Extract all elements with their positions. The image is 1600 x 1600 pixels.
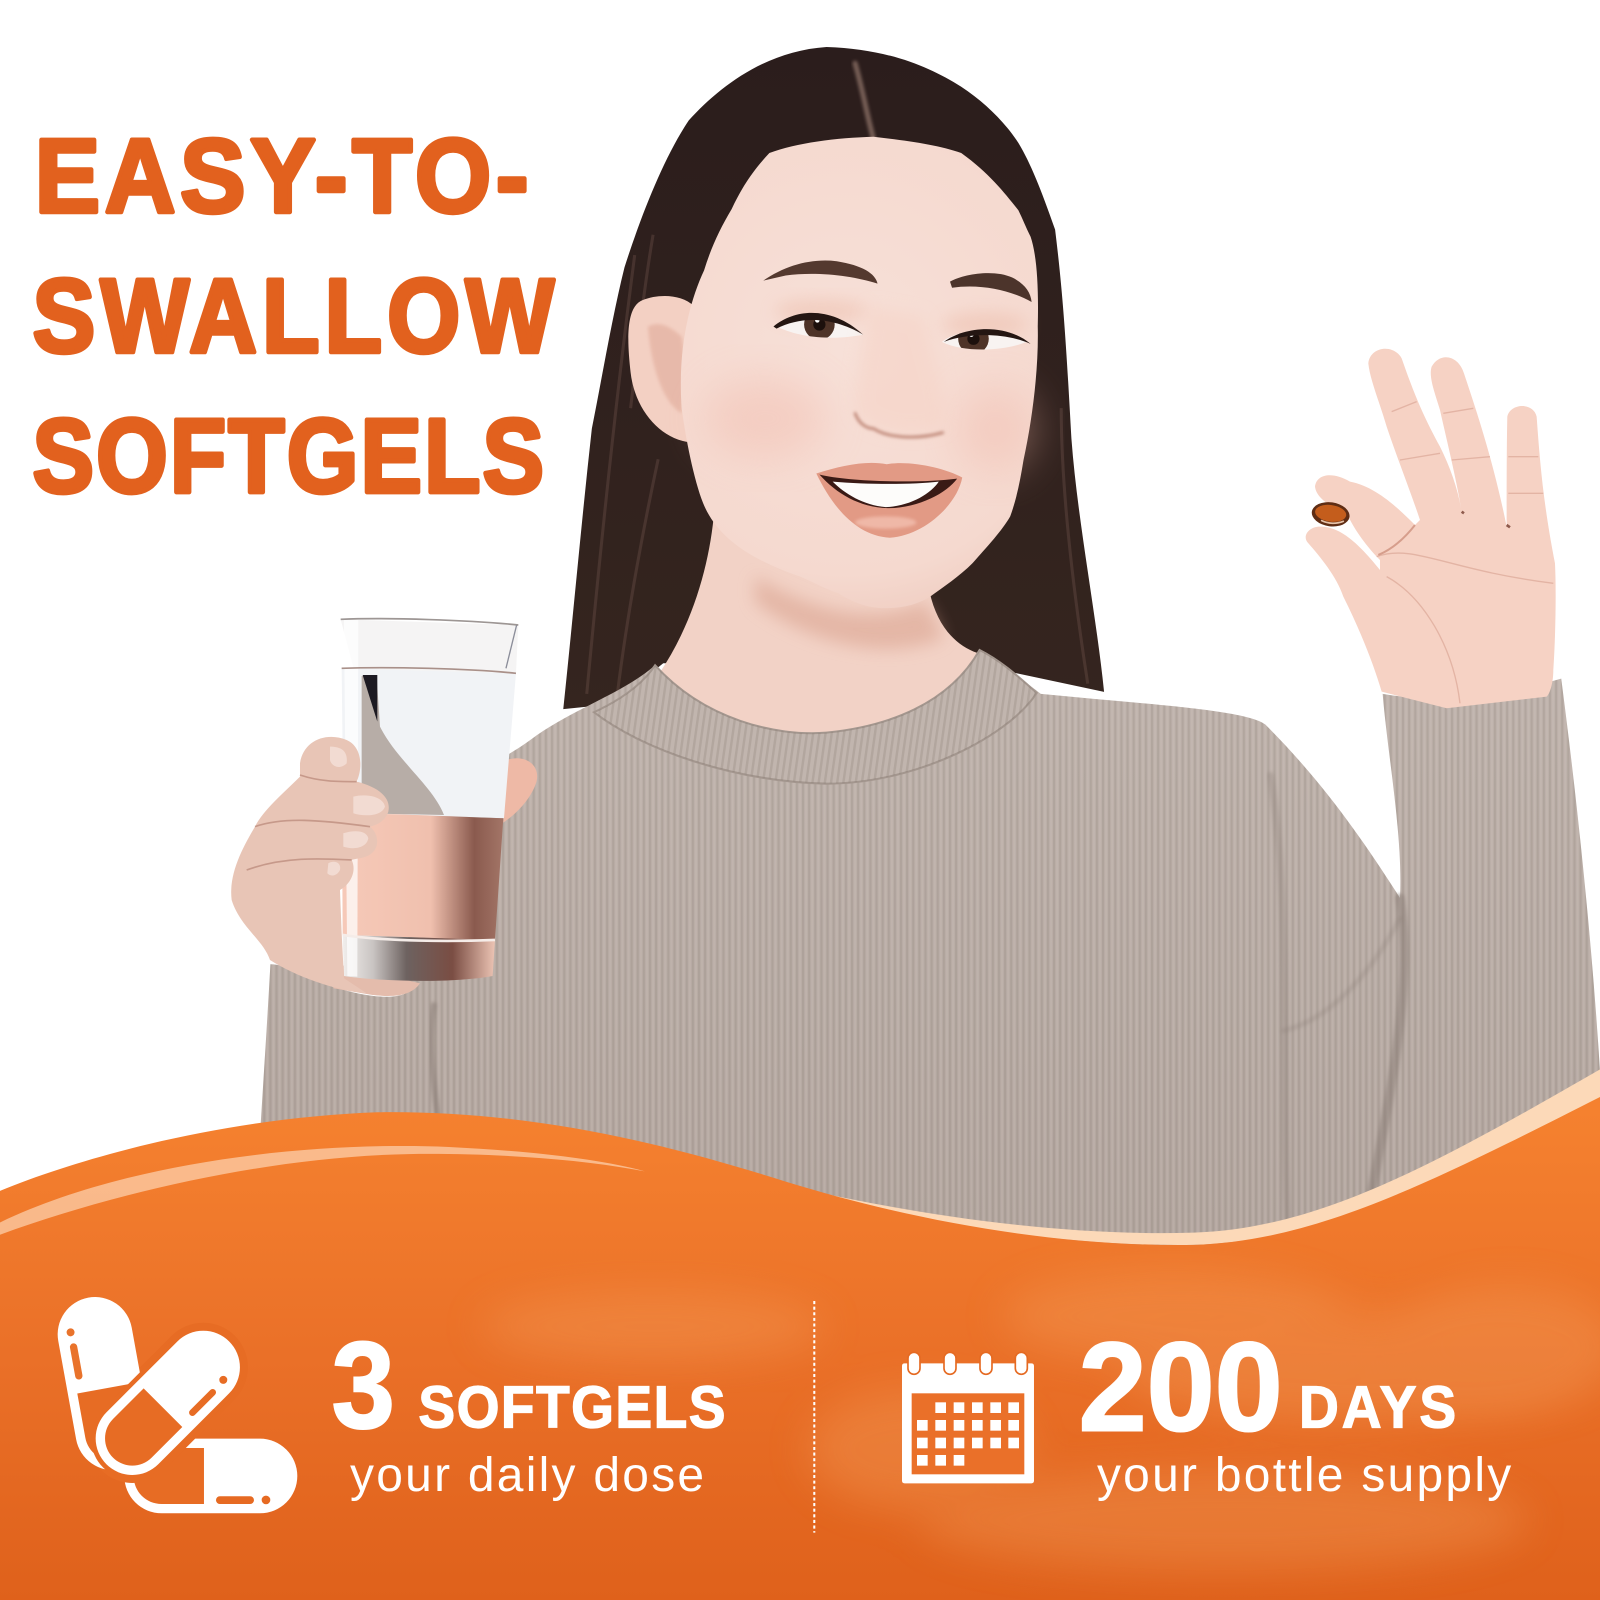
divider (813, 1301, 815, 1533)
sweater rib texture (0, 650, 1600, 1600)
eyebrow left (763, 261, 878, 284)
stat: days bottle supply: 200 (1079, 1316, 1283, 1458)
sweater collar (594, 650, 1037, 784)
capsule tilted (52, 1291, 156, 1476)
sweater folds (431, 776, 1404, 1224)
icon: calendar (902, 1352, 1034, 1483)
ear inner (648, 324, 685, 413)
orange wave band (0, 1069, 1600, 1600)
softgel capsule (1310, 500, 1351, 529)
eye shadow (774, 299, 1028, 337)
headline: SWALLOW (33, 258, 554, 375)
ear (628, 296, 709, 442)
stat: days bottle supply (1079, 1316, 1511, 1502)
headline: EASY-TO- (35, 117, 529, 235)
stat: softgels daily dose: 3 (332, 1317, 395, 1455)
left hand palm base (333, 963, 420, 996)
mouth (816, 463, 962, 538)
nose (855, 306, 945, 437)
gap around diagonal capsule (80, 1316, 255, 1490)
hair strands (587, 235, 1088, 694)
face (681, 137, 1038, 608)
left hand (231, 737, 389, 993)
right hand (1306, 349, 1556, 708)
cheek blush right (956, 386, 1034, 471)
collar ribs (594, 650, 1037, 784)
headline (33, 117, 554, 514)
cheek blush (704, 378, 827, 459)
headline: SOFTGELS (33, 397, 544, 514)
swoosh highlight (0, 1146, 645, 1235)
drinking glass (341, 619, 518, 981)
stat: softgels daily dose (332, 1317, 726, 1502)
clouds (480, 1270, 1600, 1571)
left hand back thumb (503, 758, 537, 823)
stat: days bottle supply: your bottle supply (1097, 1449, 1511, 1502)
capsule diagonal (80, 1316, 255, 1490)
stat: softgels daily dose: your daily dose (350, 1449, 704, 1502)
neck (659, 510, 978, 733)
icon: softgel capsules (52, 1291, 297, 1513)
chin shadow (755, 577, 944, 649)
band fill (0, 1097, 1600, 1600)
hair parting (855, 63, 873, 139)
eye right (942, 329, 1030, 350)
eye left (774, 312, 863, 338)
capsule lower (124, 1439, 297, 1513)
cream wave line (816, 1069, 1600, 1245)
sweater body (0, 650, 1600, 1600)
stat: softgels daily dose: SOFTGELS (418, 1375, 726, 1441)
hair (563, 47, 1104, 709)
eyebrow right (950, 273, 1032, 302)
stat: days bottle supply: DAYS (1299, 1375, 1456, 1441)
